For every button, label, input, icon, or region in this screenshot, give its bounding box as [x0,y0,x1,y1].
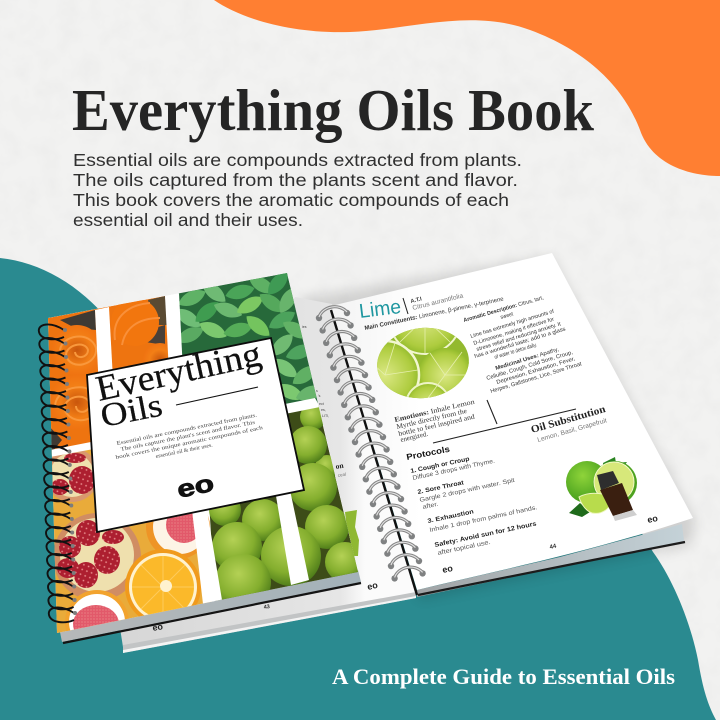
cover underside [60,570,361,643]
cover logo: eo [175,470,216,504]
right page footer eo: eo [441,563,454,575]
left page lime image [345,510,359,556]
pomegranate large [53,513,141,601]
left page sub label: ceal [337,472,346,478]
lime description: of water to detox daily. [494,342,538,361]
protocol 2: 2. Sore Throat [417,479,464,496]
A.T.I label: A.T.I [410,296,423,305]
intro text [73,150,522,230]
lime description: has a wonderful taste; add to a glass [474,326,567,360]
medicinal uses: Cellulite, Cough, Cold Sore, Croup, [486,350,574,382]
photo: limes [209,405,358,601]
gutter line [331,310,417,595]
section dividers [433,400,576,443]
emotions [394,398,476,444]
medicinal uses: Herpes, Gallstones, Lice, Sore Throat [490,361,583,395]
orange blob [214,0,720,176]
tagline: A Complete Guide to Essential Oils [332,664,675,689]
lime description: Lime has extremely high amounts of [470,309,555,340]
protocol 3: Inhale 1 drop from palms of hands. [429,504,538,534]
right page number: 44 [549,544,558,551]
grapefruit [146,514,210,558]
right page [331,253,693,597]
protocol 3: 3. Exhaustion [427,508,475,525]
photo: roses [48,296,178,455]
safety note: after topical use. [437,539,491,557]
oil substitution list: Lemon, Basil, Grapefruit [537,417,608,444]
left page text fragments: ies [302,325,307,329]
medicinal uses: Depression, Exhaustion, Fever, [496,356,576,386]
cover title: Everything [92,333,265,409]
medicinal uses: Medicinal Uses: Apathy, [495,347,560,372]
cover blurb: The oils capture the plant's scent and flavor. This [120,419,256,453]
cover blurb: Essential oils are compounds extracted from plants. [116,411,258,447]
medicinal uses [486,347,583,395]
protocol 2: Gargle 2 drops with water. Spit [419,477,516,504]
photo: mint [178,273,318,404]
left page text fragments: es, [321,408,326,412]
intro text: This book covers the aromatic compounds of each [73,190,509,210]
cover blurb [115,411,264,461]
heading divider [403,298,408,314]
left page section label: on [335,461,345,471]
left page text fragments [302,325,329,418]
aromatic description: Aromatic Description: Citrus, tart, [463,295,545,324]
bottle [600,483,633,516]
left page eo: eo [366,580,379,592]
oil substitution heading: Oil Substitution [530,404,607,436]
aromatic description: sweet [500,311,514,321]
book shadow [300,256,696,600]
lime description [470,309,567,361]
intro text: The oils captured from the plants scent and flavor. [73,170,518,190]
safety note: Safety: Avoid sun for 12 hours [434,520,538,549]
lime description: D-Limonene, making it effective for [473,317,555,347]
black spiral binding [39,324,77,622]
cover blurb: essential oil & their uses. [155,442,214,460]
emotions: energized. [400,430,429,444]
intro text: Essential oils are compounds extracted from plants. [73,150,522,170]
left page text fragments: s [316,389,318,393]
grapefruit lower [65,590,128,631]
photo: citrus and pomegranate [52,450,212,633]
safety note [434,520,538,557]
lime description: stress relief and reducing anxiety. It [476,321,562,353]
protocols heading: Protocols [405,444,451,462]
right page corner eo: eo [646,513,659,525]
protocol 2 [417,477,516,511]
emotions: bottle to feel inspired and [398,412,476,438]
emotions: Myrtle directly from the [396,407,468,431]
lower page edge [123,592,416,653]
left inner page [120,297,416,653]
title: Everything Oils Book [72,77,594,143]
emotions: Emotions: Inhale Lemon [394,398,476,424]
cover title panel: Oils [98,388,165,435]
lime photo disc [377,328,469,398]
cover photo collage [48,273,358,633]
page sheet [331,253,693,590]
left page footer number: 43 [263,604,270,611]
heading Lime: Lime [358,296,402,323]
protocol 1: Diffuse 3 drops with Thyme. [412,458,496,482]
cover title panel [87,333,304,532]
left page text fragments: ect [319,402,324,406]
protocol 1: 1. Cough or Croup [410,456,470,475]
page edge [417,524,684,597]
left page text fragments: LITI, [322,414,329,418]
cover [48,273,358,633]
left page footer eo: eo [152,621,164,633]
latin name: Citrus aurantifolia [412,292,464,312]
icon: lime and oil bottle [566,457,637,521]
main constituents: Main Constituents: Limonene, β-pinene, γ-terpinene [364,296,505,332]
pomegranate small [52,450,94,502]
cover rule [176,387,258,405]
cover blurb: book covers the unique aromatic compounds of each [115,424,264,461]
silver spiral rings [316,307,426,582]
protocol 2: after. [422,501,439,511]
orange slice [125,549,201,616]
left page text fragments: 's [318,394,321,398]
teal blob [0,258,716,720]
cover white strips [50,293,320,604]
intro text: essential oil and their uses. [73,210,303,230]
